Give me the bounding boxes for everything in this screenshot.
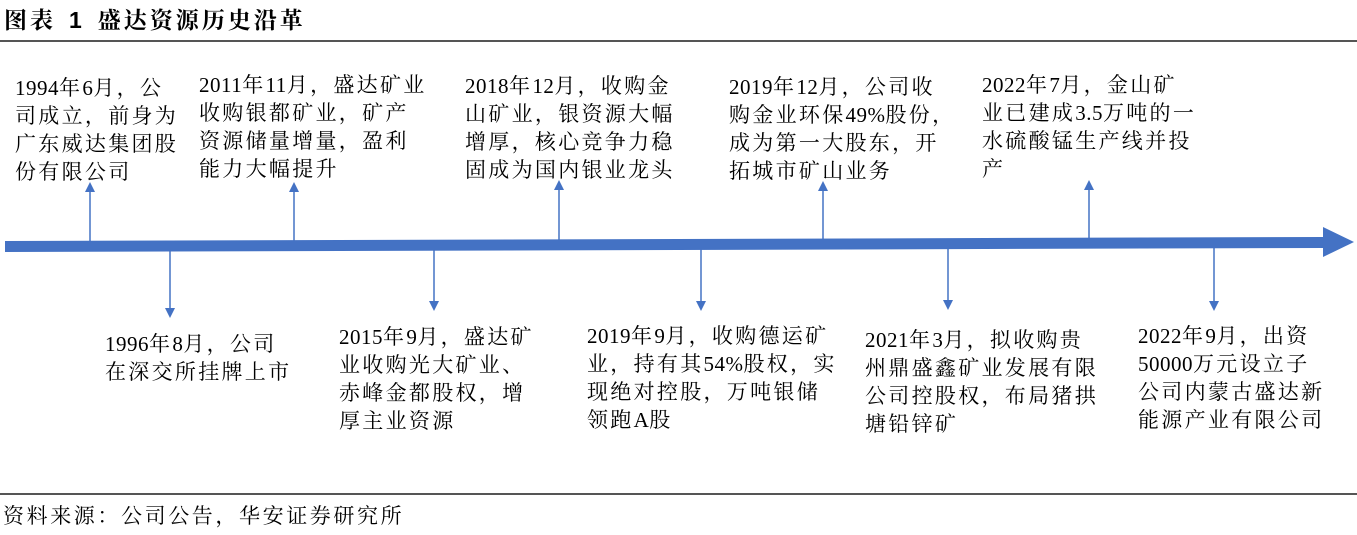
event 2022 Jul: 业已建成3.5万吨的一: [982, 101, 1196, 125]
footer rule: [0, 493, 1357, 495]
event 2019 Dec: 购金业环保49%股份，: [729, 103, 955, 127]
event 2021: 2021年3月，拟收购贵: [865, 328, 1083, 352]
event 1994: 1994年6月，公: [15, 76, 163, 100]
event 2011: 资源储量增量，盈利: [199, 129, 409, 153]
event 2019 Sep: 领跑A股: [587, 408, 673, 432]
event 2021: 公司控股权，布局猪拱: [865, 384, 1098, 408]
event 2019 Sep: 2019年9月，收购德运矿: [587, 324, 828, 348]
event 2022 Sep: 公司内蒙古盛达新: [1138, 380, 1324, 404]
event 2019 Sep: 现绝对控股，万吨银储: [587, 380, 820, 404]
event 2018: 2018年12月，收购金: [465, 74, 671, 98]
event 2018: 增厚，核心竞争力稳: [465, 130, 675, 154]
event 2019 Sep: 业，持有其54%股权，实: [587, 352, 837, 376]
event 2022 Sep: 能源产业有限公司: [1138, 408, 1324, 432]
event 2019 Dec: 拓城市矿山业务: [729, 159, 892, 183]
event 2015: [339, 325, 534, 433]
event 2022 Jul: 产: [982, 157, 1005, 181]
event 2022 Jul: 水硫酸锰生产线并投: [982, 129, 1192, 153]
event 2018: 固成为国内银业龙头: [465, 158, 675, 182]
event 2011: 能力大幅提升: [199, 157, 339, 181]
event 2021: [865, 328, 1098, 436]
event 2022 Sep: [1138, 324, 1324, 432]
title: 图表 1 盛达资源历史沿革: [4, 7, 306, 33]
header rule: [0, 40, 1357, 42]
event 2022 Sep: 50000万元设立子: [1138, 352, 1310, 376]
event 1996: 1996年8月，公司: [105, 332, 277, 356]
event 2011: 2011年11月，盛达矿业: [199, 73, 427, 97]
event 1996: 在深交所挂牌上市: [105, 360, 291, 384]
event 1994: [15, 76, 178, 184]
event 2015: 2015年9月，盛达矿: [339, 325, 534, 349]
source note: 资料来源：公司公告，华安证券研究所: [3, 504, 404, 528]
event 2022 Jul: 2022年7月，金山矿: [982, 73, 1177, 97]
event 2015: 赤峰金都股权，增: [339, 381, 525, 405]
event 1994: 广东威达集团股: [15, 132, 178, 156]
event 2011: 收购银都矿业，矿产: [199, 101, 409, 125]
event 2021: 塘铅锌矿: [865, 412, 958, 436]
event 2022 Jul: [982, 73, 1196, 181]
event 2021: 州鼎盛鑫矿业发展有限: [865, 356, 1098, 380]
event 1996: [105, 332, 291, 384]
event 1994: 份有限公司: [15, 160, 132, 184]
event 1994: 司成立，前身为: [15, 104, 178, 128]
event 2019 Dec: 成为第一大股东，开: [729, 131, 939, 155]
event 2019 Dec: [729, 75, 955, 183]
event 2018: [465, 74, 675, 182]
event 2019 Sep: [587, 324, 837, 432]
event 2022 Sep: 2022年9月，出资: [1138, 324, 1310, 348]
event 2018: 山矿业，银资源大幅: [465, 102, 675, 126]
event 2015: 业收购光大矿业、: [339, 353, 525, 377]
event 2011: [199, 73, 427, 181]
event 2015: 厚主业资源: [339, 409, 456, 433]
event 2019 Dec: 2019年12月，公司收: [729, 75, 935, 99]
